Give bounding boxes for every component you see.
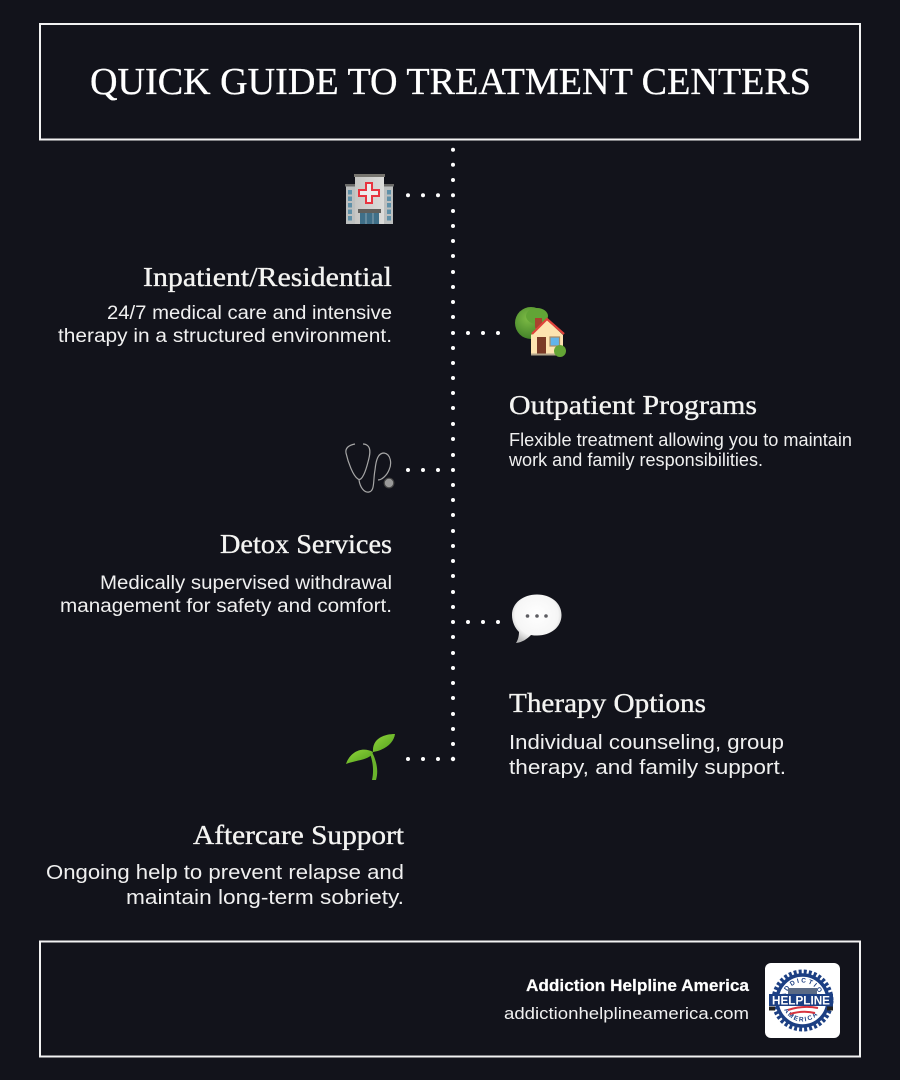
text: inpatient: 24/7 medical care and intensive [107,303,392,324]
step: inpatient [58,262,392,347]
icon: hospital [345,174,394,224]
step: detox [60,529,392,617]
text: aftercare: Ongoing help to prevent relapse and [46,862,404,884]
text: aftercare: maintain long-term sobriety. [126,887,404,909]
text: therapy: therapy, and family support. [509,757,786,779]
icon: speech bubble [512,594,562,643]
connector: aftercare [406,757,440,761]
connector: therapy [466,620,500,624]
connector: inpatient [406,193,440,197]
logo: HELPLINE [772,996,830,1008]
heading: aftercare: Aftercare Support [193,820,405,850]
header panel [40,24,860,140]
heading: detox: Detox Services [220,529,392,559]
logo [765,963,840,1038]
connector: detox [406,468,440,472]
step: therapy [509,688,786,779]
brand name: Addiction Helpline America [526,976,750,995]
website: addictionhelplineamerica.com [504,1004,749,1023]
heading: inpatient: Inpatient/Residential [143,262,392,292]
heading: outpatient: Outpatient Programs [509,390,757,420]
title: QUICK GUIDE TO TREATMENT CENTERS [90,61,811,103]
text: inpatient [58,303,392,347]
text: outpatient: Flexible treatment allowing you to maintain [509,430,852,450]
step: aftercare [46,820,405,909]
text: detox: Medically supervised withdrawal [100,573,392,594]
icon: seedling [346,734,395,780]
connector: outpatient [466,331,500,335]
footer panel [39,940,861,1058]
text: therapy: Individual counseling, group [509,732,784,754]
logo: AMERICA [784,1008,818,1022]
text: detox [60,573,392,617]
logo: ADDICTION [782,978,822,994]
dotted timeline [451,148,455,761]
text: therapy [509,732,786,779]
icon: stethoscope [346,444,394,492]
text: outpatient [508,430,852,470]
text: inpatient: therapy in a structured environment. [58,326,392,347]
text: outpatient: work and family responsibilities. [508,450,763,470]
heading: therapy: Therapy Options [509,688,706,718]
step: outpatient [508,390,852,470]
text: detox: management for safety and comfort. [60,596,392,617]
text: aftercare [46,862,404,909]
icon: house with tree [515,307,566,357]
